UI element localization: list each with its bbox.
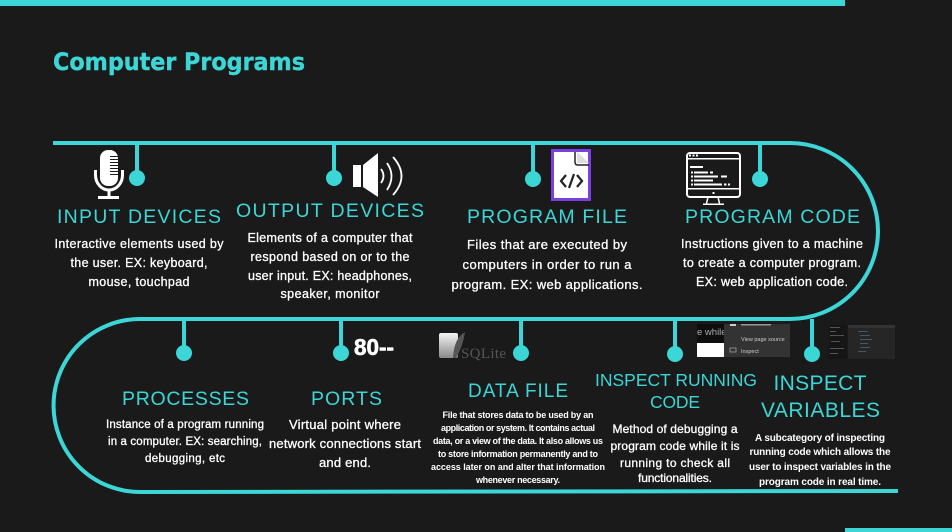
panel: processes (106, 319, 264, 465)
text: inspect variables: program code in real time. (759, 477, 881, 488)
text: data file (431, 410, 605, 485)
icon: code monitor (687, 153, 740, 205)
text: input devices (54, 237, 224, 289)
heading: inspect variables: INSPECT (774, 372, 867, 395)
heading: program code: PROGRAM CODE (685, 206, 860, 228)
text: output devices: respond based on or to the (250, 250, 410, 264)
icon: code file (552, 150, 590, 200)
top accent bar (0, 0, 845, 6)
heading: input devices: INPUT DEVICES (57, 206, 221, 228)
connector: output devices (326, 143, 342, 186)
icon: port 80: 80-- (354, 334, 394, 360)
text: inspect variables: user to inspect variables in the (749, 462, 891, 473)
icon: browser context menu screenshot: Inspect (741, 349, 759, 355)
text: input devices: Interactive elements used by (54, 237, 224, 251)
title: Computer Programs (53, 48, 305, 76)
panel: ports (269, 319, 421, 470)
text: inspect running code: functionalities. (638, 471, 712, 485)
text: program code: to create a computer program. (683, 256, 861, 270)
panel: output devices (236, 143, 424, 301)
text: data file: to store information permanently and to (438, 449, 598, 459)
text: processes: Instance of a program running (106, 419, 264, 431)
text: program file: computers in order to run a (462, 257, 632, 272)
icon: speaker (353, 153, 402, 197)
heading: program file: PROGRAM FILE (467, 206, 627, 228)
text: program file: Files that are executed by (467, 237, 628, 252)
text: output devices: user input. EX: headphones, (248, 269, 412, 283)
text: program code: EX: web application code. (696, 275, 848, 289)
text: input devices: the user. EX: keyboard, (70, 256, 208, 270)
text: data file: File that stores data to be used by an (442, 410, 594, 420)
text: processes: debugging, etc (145, 453, 225, 465)
text: data file: access later on and alter that information (431, 462, 605, 472)
text: inspect running code (610, 422, 740, 485)
text: processes: in a computer. EX: searching, (108, 436, 262, 448)
icon: SQLite logo: SQLite (461, 346, 506, 362)
text: program code (681, 237, 863, 289)
heading: data file: DATA FILE (468, 381, 568, 402)
panel: program file (452, 143, 642, 292)
text: processes (106, 419, 264, 465)
connector: inspect running code (667, 319, 683, 362)
panel: program code (681, 143, 863, 289)
text: data file: application or system. It contains actual (441, 423, 595, 433)
panel: input devices (54, 143, 224, 289)
icon: browser context menu screenshot: View page source (741, 337, 785, 343)
text: input devices: mouse, touchpad (88, 275, 190, 289)
connector: program code (752, 143, 768, 187)
icon: devtools screenshot (829, 325, 895, 359)
heading: ports: PORTS (311, 388, 382, 410)
text: data file: data, or a view of the data. It also allows us (433, 436, 603, 446)
text: inspect running code: running to check all (620, 456, 730, 470)
text: inspect running code: program code while it is (610, 439, 740, 453)
panel: inspect variables: VARIABLES (761, 399, 880, 422)
icon: browser context menu screenshot (697, 324, 790, 357)
connector: ports (333, 319, 349, 361)
heading: processes: PROCESSES (122, 388, 249, 410)
connector: inspect variables (804, 319, 820, 362)
panel: inspect running code: CODE (650, 392, 700, 412)
text: output devices: Elements of a computer that (248, 231, 413, 245)
icon: SQLite logo (439, 332, 506, 362)
text: data file: whenever necessary. (475, 475, 560, 485)
text: inspect variables: A subcategory of inspecting (755, 433, 885, 444)
text: ports (269, 417, 421, 470)
panel: data file (431, 319, 605, 485)
connector: data file (513, 319, 529, 361)
text: ports: and end. (319, 455, 371, 470)
icon: browser context menu screenshot: e while (697, 327, 727, 338)
heading: output devices: OUTPUT DEVICES (236, 200, 424, 222)
text: ports: network connections start (269, 436, 421, 451)
connector: program file (525, 143, 541, 187)
text: output devices: speaker, monitor (280, 287, 380, 301)
panel: inspect variables (749, 319, 895, 488)
timeline path (53, 143, 898, 492)
text: inspect variables (749, 433, 891, 488)
text: inspect running code: Method of debugging a (612, 422, 738, 436)
icon: microphone (96, 150, 122, 199)
text: inspect variables: running code which allows the (750, 447, 891, 458)
text: program code: Instructions given to a machine (681, 237, 863, 251)
heading: inspect running code: INSPECT RUNNING (595, 370, 757, 390)
connector: processes (176, 319, 192, 361)
text: output devices (248, 231, 413, 301)
text: program file (452, 237, 642, 292)
panel: inspect running code (595, 319, 790, 485)
text: program file: program. EX: web applications. (452, 277, 642, 292)
bottom accent bar (845, 528, 952, 532)
connector: input devices (129, 143, 145, 186)
text: ports: Virtual point where (289, 417, 401, 432)
